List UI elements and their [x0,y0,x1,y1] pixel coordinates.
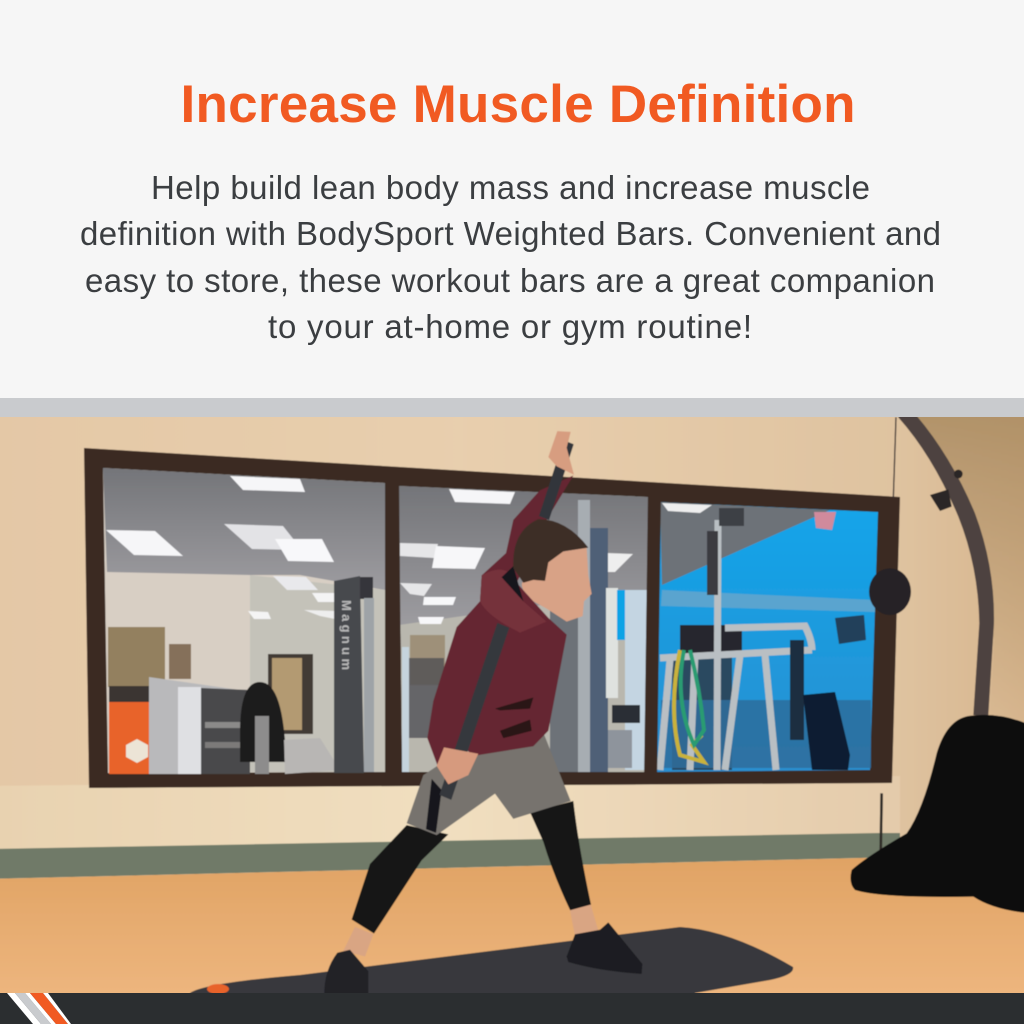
mat orange logo [207,984,229,994]
dark collar [502,566,523,601]
body text: definition with BodySport Weighted Bars. Convenient and [80,215,941,252]
curved arm [898,410,994,715]
shorts stripe [426,779,442,833]
lower hand [437,747,478,784]
body text: Help build lean body mass and increase muscle [151,169,870,206]
lower weighted bar [445,625,503,797]
punching bag stand [851,410,1024,913]
athlete with weighted bar [324,431,642,997]
hood shading [480,569,547,633]
left pane: Magnum [339,600,354,670]
grey divider band [0,398,1024,417]
gym photo scene [0,405,1024,1005]
front ankle [570,905,598,936]
floor [0,857,1024,1005]
tall machine column [334,576,364,773]
gym rack [660,520,812,770]
upper hand [548,431,574,475]
bottom strap [881,793,882,855]
exercise mat [190,926,794,993]
black machine pad [240,682,286,762]
speed ball [869,568,911,615]
stand cord [893,417,896,498]
front leg tights [530,801,591,911]
upper weighted bar [544,442,569,518]
body text [80,169,941,345]
neck and face [522,548,592,622]
shorts [407,733,571,835]
orange cabinet [109,702,150,774]
footer chevron stripes [7,993,71,1024]
baseboard [0,833,900,879]
bottom footer bar [0,993,1024,1024]
frame mullions [398,490,401,702]
weighted base cover [851,715,1024,913]
back ankle [343,927,373,956]
wall [0,405,1024,857]
title: Increase Muscle Definition [180,75,856,134]
middle pane [399,486,648,772]
body text: to your at-home or gym routine! [268,308,752,345]
resistance bands [674,650,704,762]
window [84,448,900,788]
bracket [930,489,952,511]
white rack [149,677,240,774]
lower wall [0,776,900,850]
right pane [657,502,878,772]
body text: easy to store, these workout bars are a great companion [85,262,935,299]
hair [513,519,588,583]
back shoe [324,950,368,997]
window frame [84,448,900,788]
upper right wall shadow [917,417,1024,660]
hoodie [427,475,573,768]
back leg tights [352,825,448,934]
left pane [103,468,385,774]
front shoe [567,922,642,974]
